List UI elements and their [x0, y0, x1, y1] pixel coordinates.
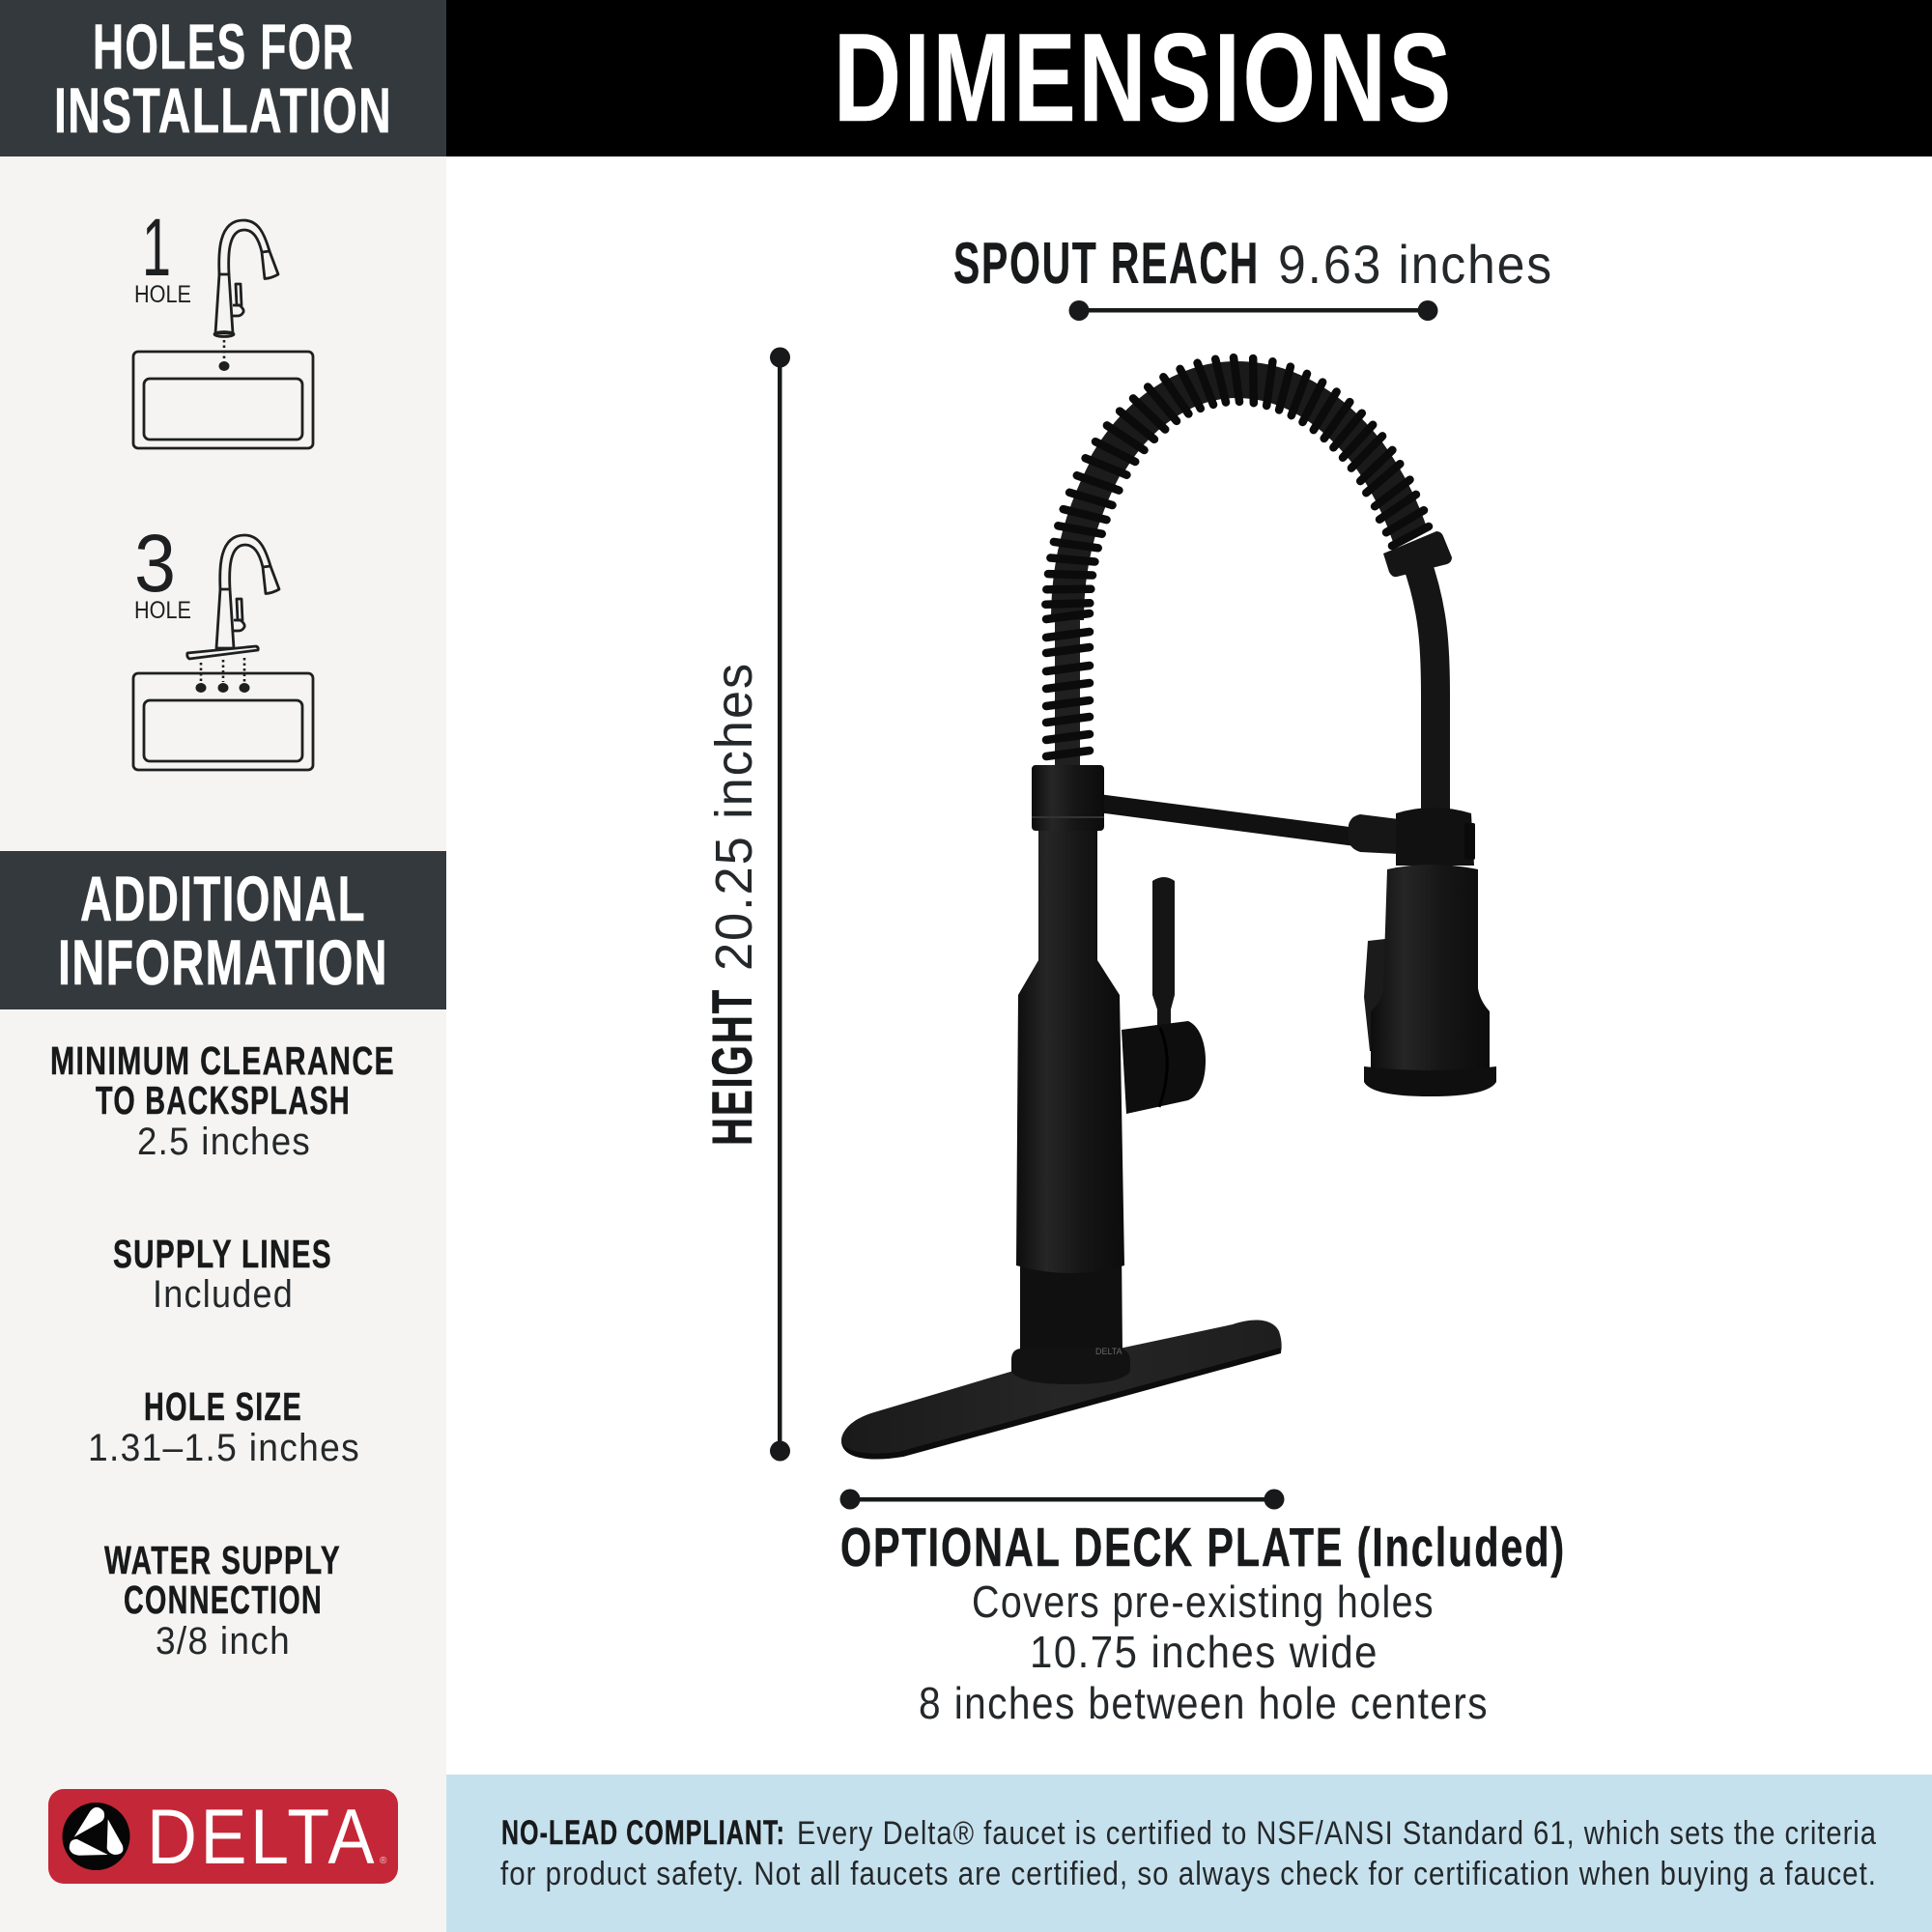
illustration: black pull-down faucet: [841, 357, 1496, 1460]
label: spout reach: 9.63 inches: [1278, 234, 1553, 295]
heading: holes for installation: [0, 0, 446, 156]
spout collar: [1383, 531, 1452, 577]
text: supply lines: [113, 1232, 332, 1316]
text: hole size: HOLE SIZE: [144, 1384, 302, 1429]
title: dimensions: [446, 0, 1932, 156]
arrow: height dimension: [770, 348, 790, 1461]
heading: additional information: ADDITIONAL: [80, 863, 366, 934]
hose: [1416, 560, 1435, 821]
text: water supply connection: WATER SUPPLY: [104, 1538, 341, 1582]
heading: additional information: INFORMATION: [58, 926, 388, 998]
text: hole size: 1.31–1.5 inches: [88, 1427, 360, 1469]
logo: delta: [48, 1789, 398, 1884]
base logo: DELTA: [1095, 1347, 1122, 1356]
heading: holes for installation: HOLES FOR: [93, 11, 355, 82]
panel: no-lead compliance note: NO-LEAD COMPLIANT:: [501, 1814, 785, 1852]
text: supply lines: Included: [153, 1273, 294, 1316]
heading: additional information: [0, 851, 446, 1009]
text: water supply connection: CONNECTION: [124, 1577, 323, 1622]
label: height: [701, 662, 764, 1146]
lower body: [1020, 1246, 1122, 1352]
icon: 1 hole installation: HOLE: [134, 281, 191, 308]
label: height: HEIGHT: [701, 988, 764, 1146]
text: water supply connection: 3/8 inch: [156, 1620, 291, 1662]
label: height: 20.25 inches: [705, 662, 763, 971]
text: minimum clearance: [50, 1038, 395, 1163]
arrow: spout reach dimension: [1068, 300, 1437, 321]
panel: no-lead compliance note: [446, 1775, 1932, 1932]
icon: 1 hole installation: [133, 202, 313, 448]
text: minimum clearance: MINIMUM CLEARANCE: [50, 1038, 395, 1083]
title: dimensions: DIMENSIONS: [834, 7, 1454, 148]
text: minimum clearance: 2.5 inches: [137, 1121, 311, 1163]
text: optional deck plate: [840, 1517, 1566, 1728]
text: optional deck plate: Covers pre-existing holes: [972, 1577, 1435, 1627]
icon: 3 hole installation: 3: [134, 518, 176, 609]
logo: delta: DELTA: [147, 1794, 378, 1881]
logo: delta: ®: [380, 1856, 387, 1866]
text: supply lines: SUPPLY LINES: [113, 1232, 332, 1276]
panel: left sidebar: [0, 0, 446, 1932]
spray head: [1364, 939, 1385, 1051]
top collar: [1032, 765, 1104, 831]
spring coil: [1045, 357, 1429, 768]
icon: 1 hole installation: 1: [142, 202, 171, 293]
handle: [1152, 877, 1175, 1025]
text: hole size: [88, 1384, 360, 1469]
arrow: deck plate dimension: [840, 1490, 1285, 1509]
text: optional deck plate: 8 inches between hole centers: [919, 1678, 1489, 1728]
heading: holes for installation: INSTALLATION: [54, 74, 392, 146]
text: water supply connection: [104, 1538, 341, 1662]
label: spout reach: SPOUT REACH: [953, 231, 1260, 296]
text: optional deck plate: 10.75 inches wide: [1030, 1627, 1378, 1677]
neck and body: [1016, 831, 1124, 1273]
swivel arm: [1087, 802, 1352, 837]
deck plate: [841, 1321, 1282, 1459]
text: minimum clearance: TO BACKSPLASH: [96, 1078, 351, 1122]
icon: 3 hole installation: HOLE: [134, 597, 191, 624]
text: optional deck plate: OPTIONAL DECK PLATE (Included): [840, 1517, 1566, 1578]
icon: 3 hole installation: [133, 518, 313, 770]
